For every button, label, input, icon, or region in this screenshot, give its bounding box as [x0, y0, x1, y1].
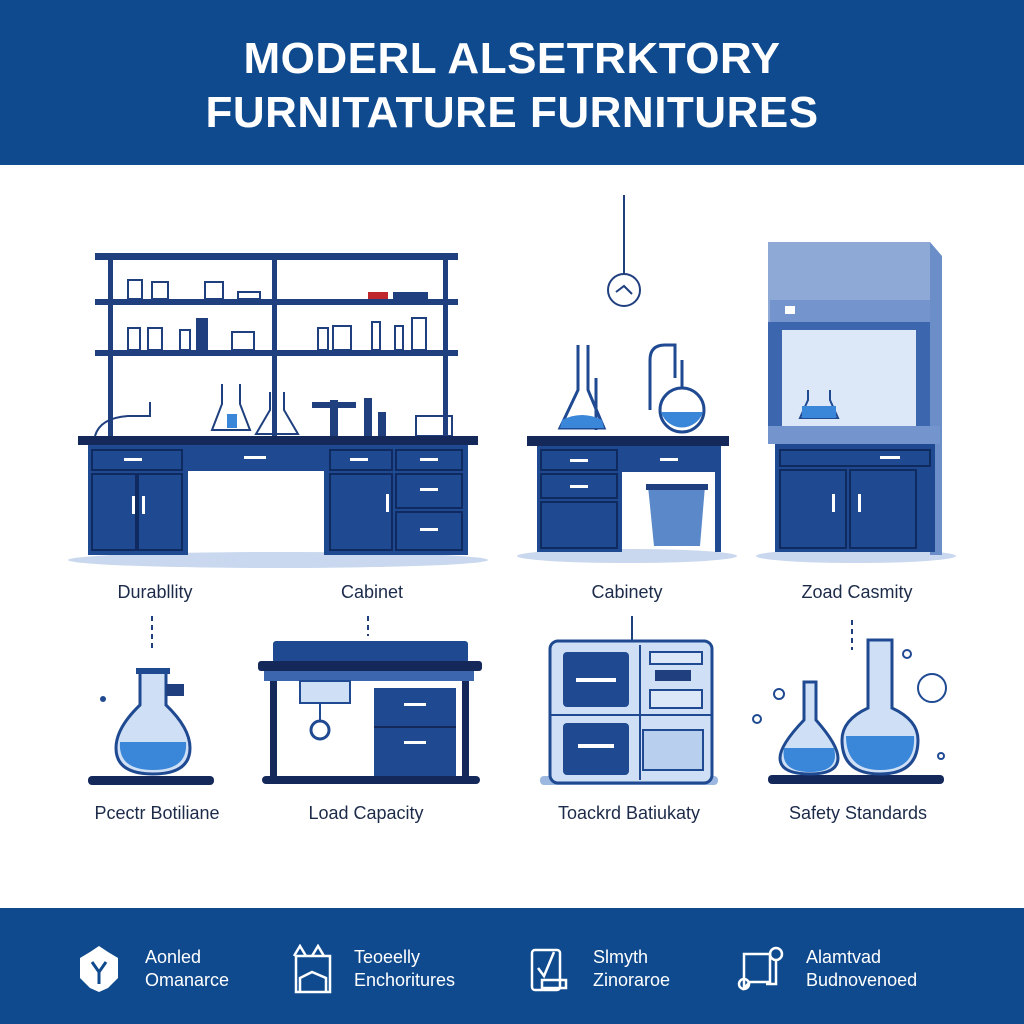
label: Toackrd Batiukaty: Toackrd Batiukaty	[558, 803, 700, 823]
text: Aonled Omanarce: Omanarce	[145, 970, 229, 990]
text: Alamtvad Budnovenoed	[806, 947, 917, 990]
text: Teoeelly Enchoritures	[354, 947, 455, 990]
text: Teoeelly Enchoritures: Teoeelly	[354, 947, 420, 967]
label: Safety Standards: Safety Standards	[789, 803, 927, 823]
label: Zoad Casmity: Zoad Casmity	[801, 582, 913, 602]
icon: flask	[88, 668, 214, 785]
pendant lamp	[608, 195, 640, 306]
label: Load Capacity: Load Capacity	[308, 803, 424, 823]
text: Alamtvad Budnovenoed: Budnovenoed	[806, 970, 917, 990]
icon: sink desk	[258, 641, 482, 784]
label: Cabinety: Cabinety	[591, 582, 663, 602]
icon: building	[293, 944, 332, 994]
icon: document pin	[738, 946, 784, 991]
title: FURNITATURE FURNITURES	[205, 88, 819, 137]
title: MODERL ALSETRKTORY	[243, 34, 781, 83]
text: Slmyth Zinoraroe: Slmyth	[593, 947, 648, 967]
middle desk with glassware	[517, 345, 737, 563]
footer	[0, 908, 1024, 1024]
text: Aonled Omanarce: Aonled	[145, 947, 201, 967]
workbench with shelves	[68, 253, 488, 568]
text: Aonled Omanarce	[145, 947, 229, 990]
text: Teoeelly Enchoritures: Enchoritures	[354, 970, 455, 990]
text: Slmyth Zinoraroe: Zinoraroe	[593, 970, 670, 990]
label: Durability: Durabllity	[117, 582, 193, 602]
dashed connectors	[152, 616, 852, 650]
label: Pcectr Botiliane: Pcectr Botiliane	[94, 803, 220, 823]
text: Alamtvad Budnovenoed: Alamtvad	[806, 947, 881, 967]
title	[205, 34, 819, 137]
text: Slmyth Zinoraroe	[593, 947, 670, 990]
icon: badge	[80, 946, 118, 992]
icon: storage cabinet	[540, 641, 718, 785]
header	[0, 0, 1024, 165]
label: Cabinet: Cabinet	[341, 582, 403, 602]
icon: checklist	[530, 948, 568, 992]
fume hood	[756, 242, 956, 563]
icon: flasks	[753, 640, 946, 784]
